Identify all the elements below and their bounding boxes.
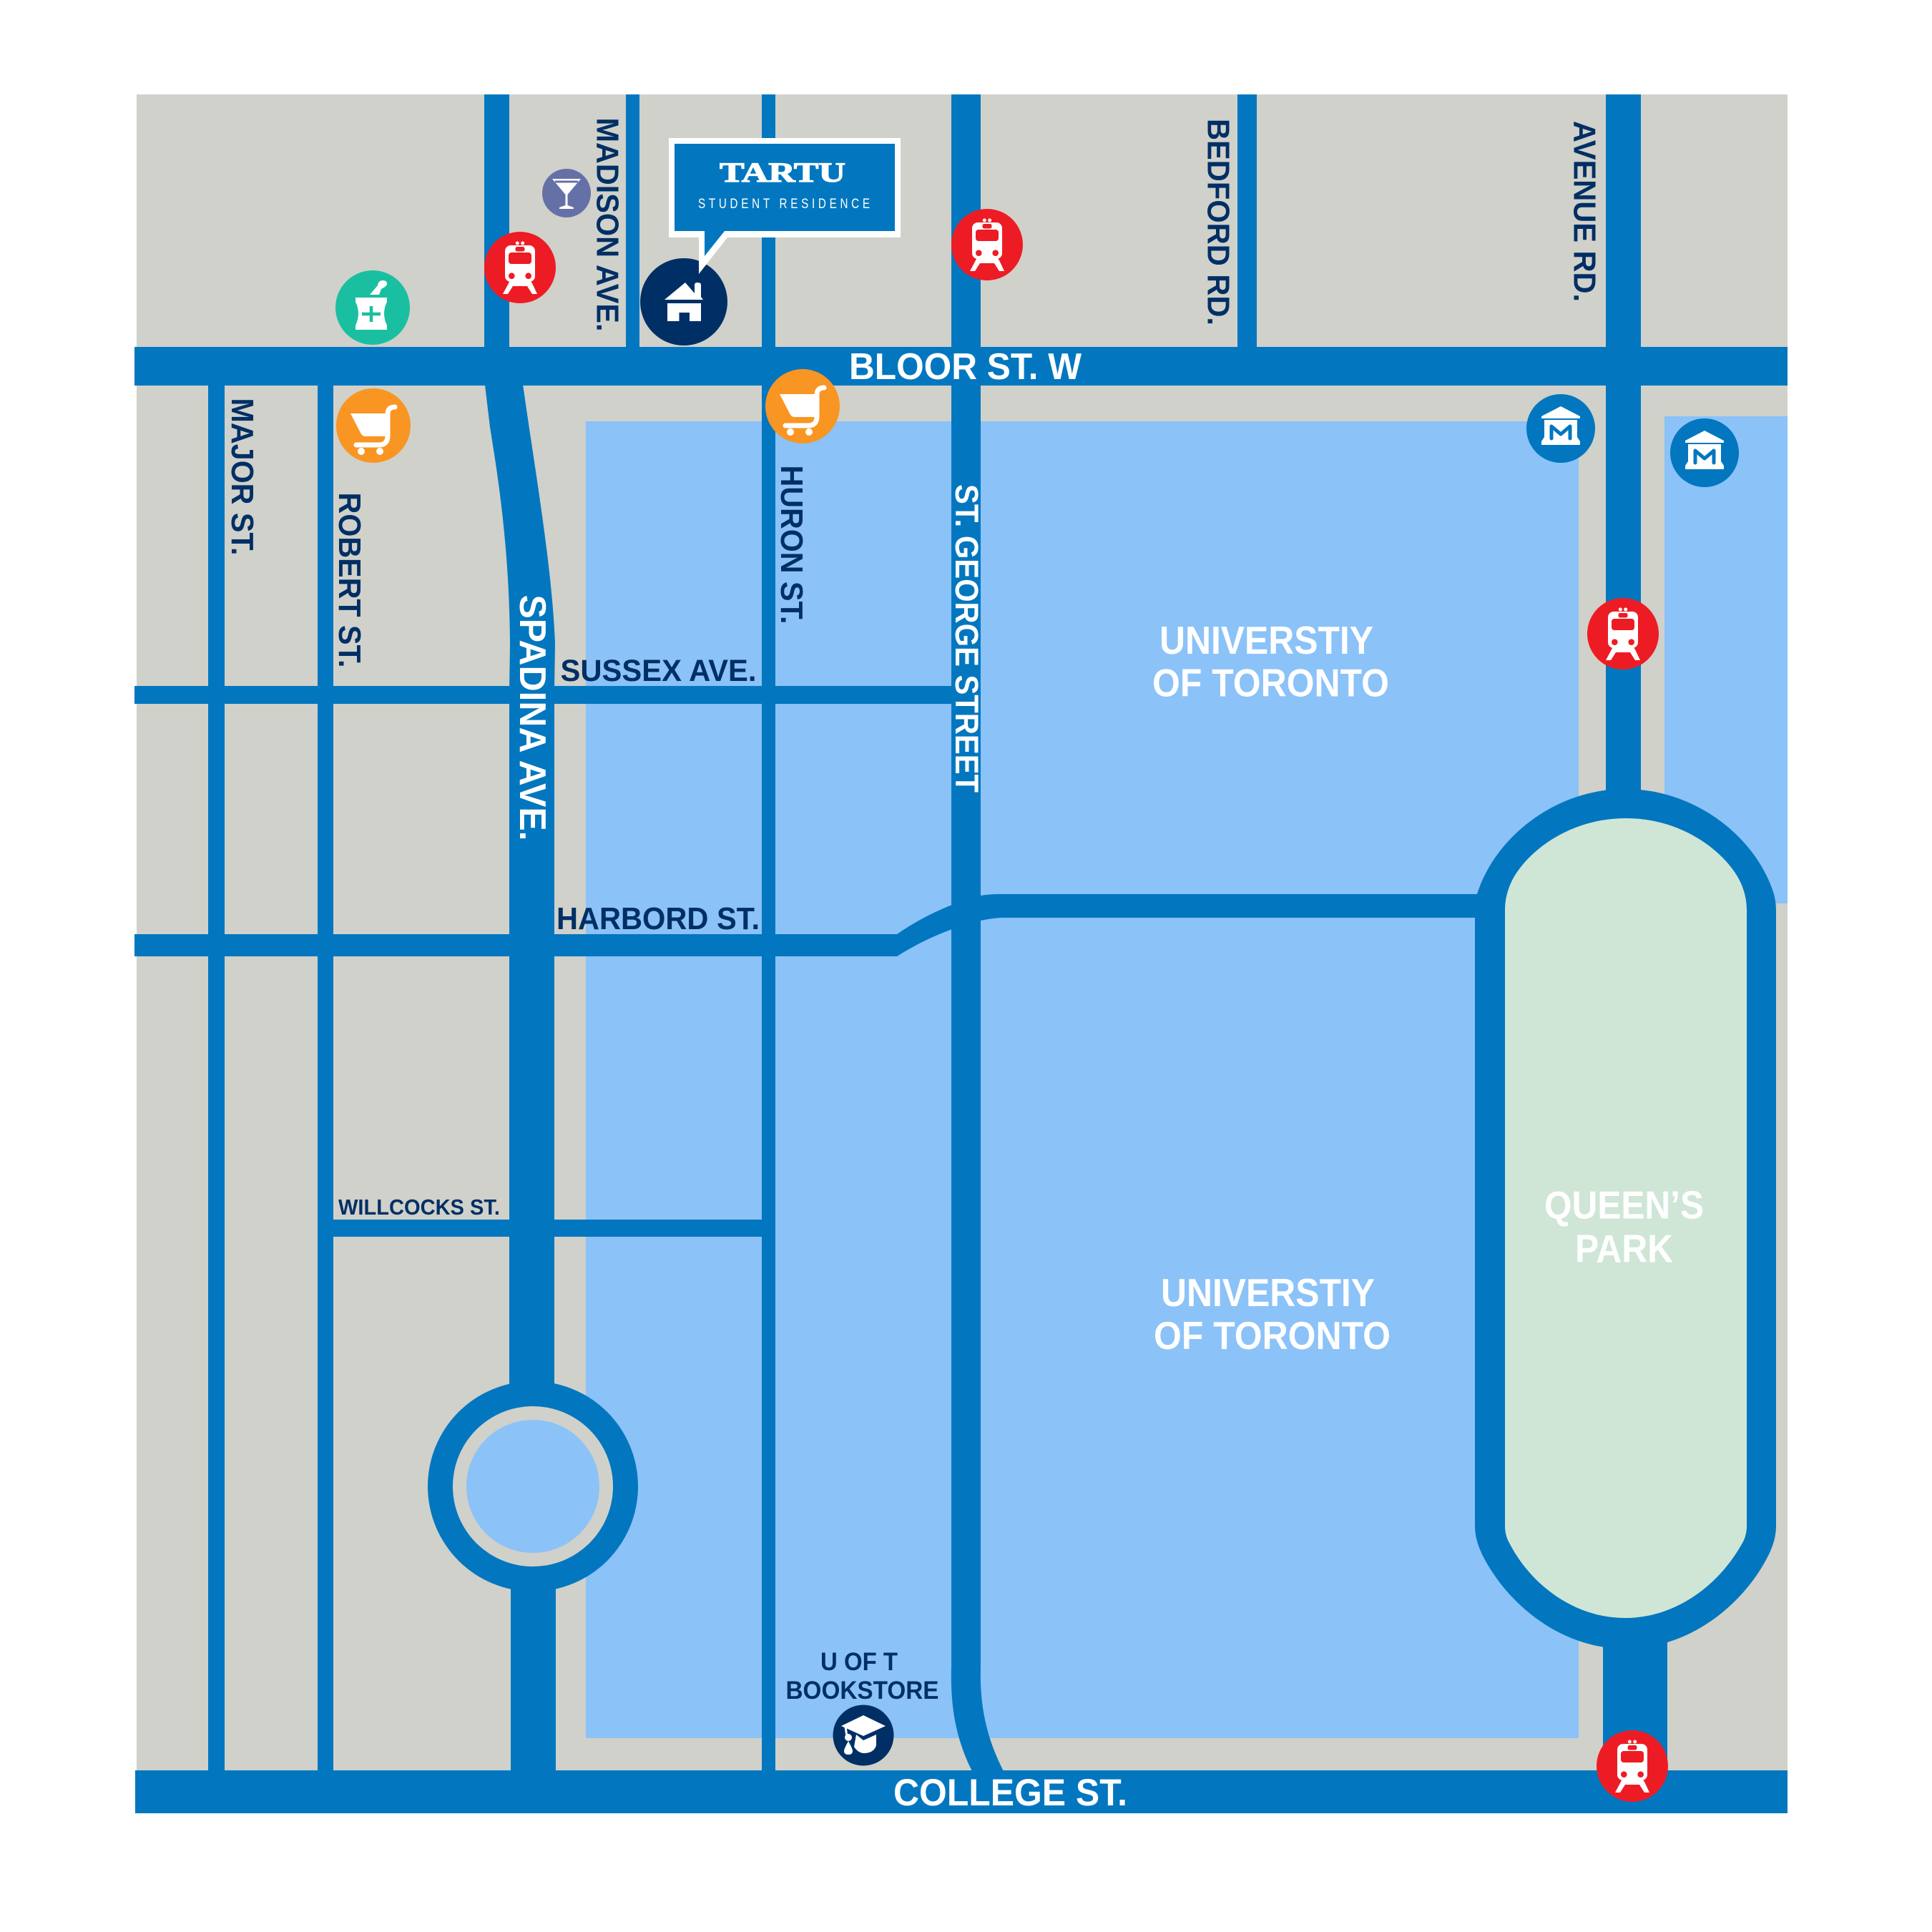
icon: grocery cart west [336,388,411,463]
road: Robert St [318,379,333,1774]
icon: subway Museum [1587,598,1659,670]
street label: Bloor St W: BLOOR ST. W [849,346,1082,388]
area label: University of Toronto lower: OF TORONTO [1154,1313,1391,1358]
area label: Queen's Park: PARK [1575,1226,1673,1270]
street label: Willcocks St: WILLCOCKS ST. [338,1195,500,1220]
label: U of T Bookstore: U OF T [820,1648,898,1676]
icon: martini bar [542,169,591,217]
road: Sussex Ave [134,686,953,704]
callout: Tartu Student Residence [669,138,901,274]
Queen's Park ring [1475,789,1776,1649]
road: Avenue Rd north [1606,94,1641,810]
street label: College St: COLLEGE ST. [893,1772,1127,1814]
icon: grocery cart Huron [765,369,840,443]
road: Willcocks St [318,1220,768,1237]
road: Spadina Ave curve [484,379,555,690]
street label: Avenue Rd: AVENUE RD. [1566,121,1602,302]
street label: St George Street: ST. GEORGE STREET [948,484,985,793]
street label: Sussex Ave: SUSSEX AVE. [561,654,757,688]
icon: subway Queen's Park [1597,1730,1668,1802]
area label: Queen's Park [1544,1183,1704,1270]
campus area: University of Toronto [586,421,1579,1738]
icon: pharmacy [335,270,410,345]
road network [134,94,1788,1813]
icon: museum west of Avenue Rd [1526,394,1595,463]
icon: bookstore graduation cap [833,1705,894,1765]
road: Spadina Ave north [484,94,509,352]
icon: home marker [640,258,727,345]
street label: Major St: MAJOR ST. [225,398,260,555]
callout: Tartu Student Residence: TARTU [720,157,845,188]
road: Bloor St W [134,347,1788,386]
area label: University of Toronto lower [1154,1270,1391,1358]
area label: University of Toronto upper [1152,618,1389,705]
icon: subway St George [951,209,1023,280]
road: St George St curve [951,1667,1005,1774]
road: Major St [208,379,225,1774]
road: Harbord St west [134,934,898,956]
road: Harbord St bend [897,894,1001,956]
road: Harbord St east [1000,894,1486,918]
street label: Harbord St: HARBORD ST. [556,901,760,936]
road: Madison Ave [626,94,639,352]
road: Spadina Ave middle [509,687,554,1402]
street label: Spadina Ave: SPADINA AVE. [511,595,553,841]
callout: Tartu Student Residence: STUDENT RESIDENCE [698,195,870,211]
street label: Madison Ave: MADISON AVE. [589,117,625,332]
road: Spadina Ave south [511,1574,556,1774]
icon: subway Spadina [484,232,556,303]
icon: museum east of Avenue Rd [1670,418,1739,487]
Queen's Park lawn [1505,818,1747,1618]
area label: Queen's Park: QUEEN’S [1544,1183,1704,1227]
street label: Robert St: ROBERT ST. [332,492,367,668]
road: Avenue Rd south [1603,1631,1667,1774]
road: College St [135,1770,1788,1813]
area label: University of Toronto upper: UNIVERSTIY [1159,618,1373,662]
roundabout [428,1381,638,1592]
label: U of T Bookstore [785,1648,938,1705]
campus area: east of Avenue Rd [1664,416,1788,903]
area label: University of Toronto upper: OF TORONTO [1152,661,1389,705]
map background [137,94,1788,1813]
road: Huron St [762,94,775,1775]
area label: University of Toronto lower: UNIVERSTIY [1161,1270,1375,1315]
street label: Huron St: HURON ST. [774,465,809,624]
street label: Bedford Rd: BEDFORD RD. [1200,119,1236,325]
road: Bedford Rd [1237,94,1257,352]
label: U of T Bookstore: BOOKSTORE [785,1677,938,1705]
road: St George St [951,94,981,1668]
